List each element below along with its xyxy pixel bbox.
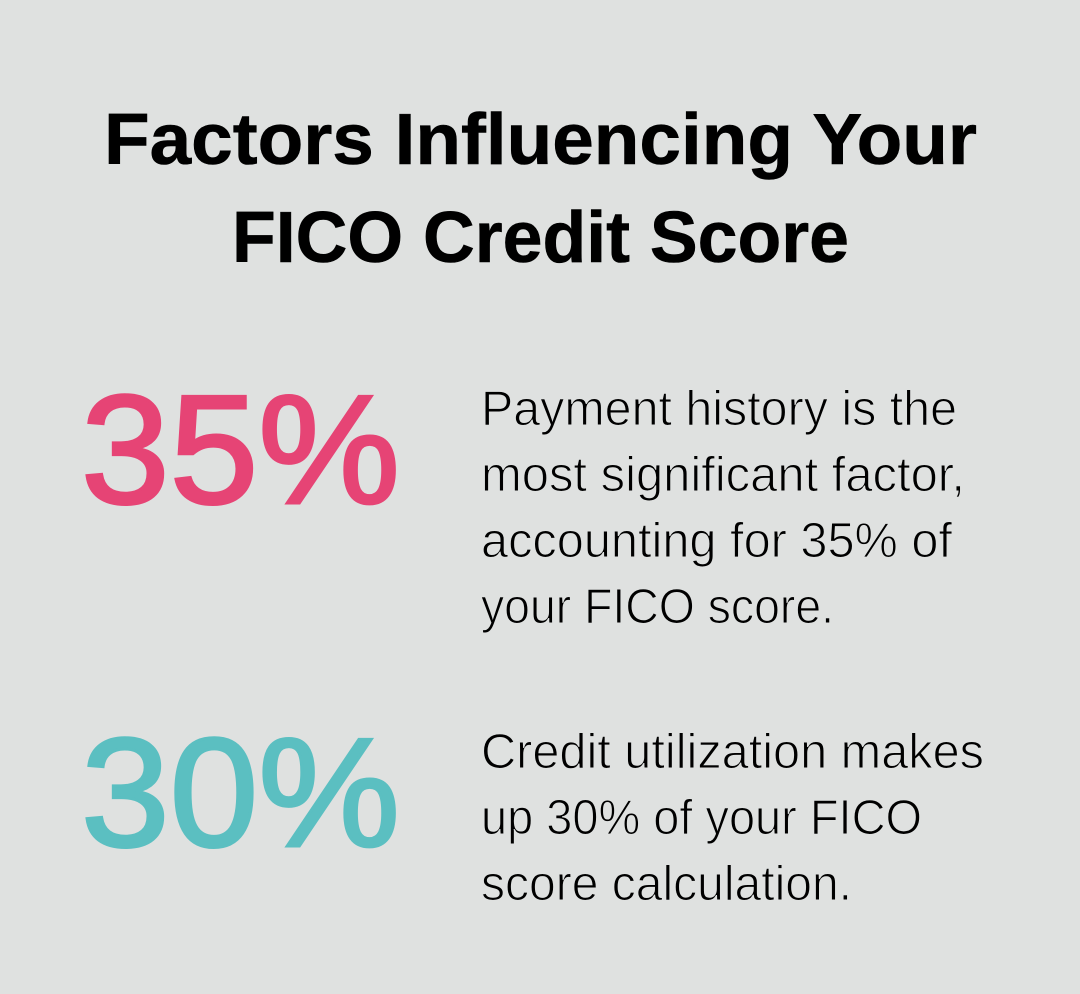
stat: 35%: 35% — [81, 363, 400, 536]
text block: credit utilization: up 30% of your FICO — [481, 791, 922, 845]
text block: credit utilization: score calculation. — [481, 857, 852, 911]
title: Factors Influencing Your — [104, 100, 977, 180]
text block: credit utilization — [481, 725, 984, 911]
text block: payment history: Payment history is the — [481, 382, 957, 436]
text block: payment history: your FICO score. — [481, 580, 834, 634]
text block: payment history — [481, 382, 965, 634]
text block: payment history: accounting for 35% of — [481, 514, 952, 568]
text block: credit utilization: Credit utilization makes — [481, 725, 984, 779]
title — [104, 100, 977, 278]
text block: payment history: most significant factor, — [481, 448, 965, 502]
title: FICO Credit Score — [232, 198, 849, 278]
stat: 30%: 30% — [81, 706, 400, 879]
